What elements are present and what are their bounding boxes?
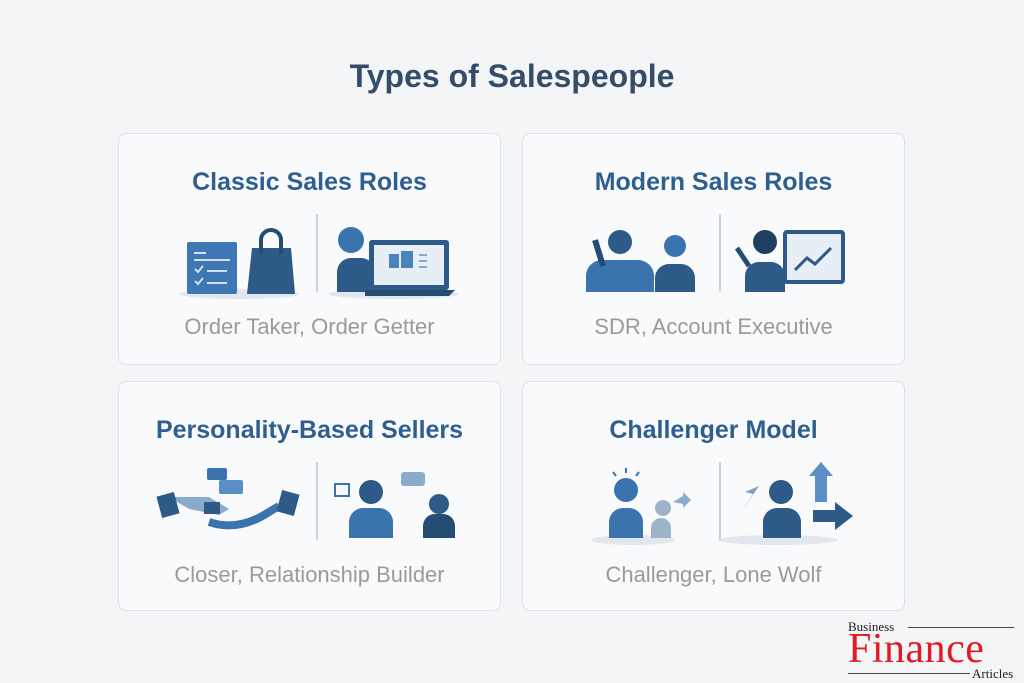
panel: modern [522, 133, 905, 365]
subtitle: classic: Order Taker, Order Getter [184, 314, 435, 339]
panel: personality [118, 381, 501, 611]
title: Types of Salespeople [350, 58, 674, 94]
panel: classic [118, 133, 501, 365]
logo [848, 619, 1014, 681]
logo: Articles [972, 666, 1013, 681]
subtitle: modern: SDR, Account Executive [594, 314, 833, 339]
heading: classic: Classic Sales Roles [192, 168, 427, 196]
heading: modern: Modern Sales Roles [595, 168, 832, 196]
heading: challenger: Challenger Model [609, 416, 818, 444]
icons: modern [586, 214, 845, 292]
subtitle: personality: Closer, Relationship Builder [174, 562, 445, 587]
icons: classic [179, 214, 459, 299]
logo: Finance [848, 626, 984, 672]
icons: challenger [591, 462, 853, 545]
panel: challenger [522, 381, 905, 611]
icons: personality [156, 462, 455, 540]
heading: personality: Personality-Based Sellers [156, 416, 463, 444]
logo: Business [848, 619, 894, 634]
subtitle: challenger: Challenger, Lone Wolf [605, 562, 822, 587]
